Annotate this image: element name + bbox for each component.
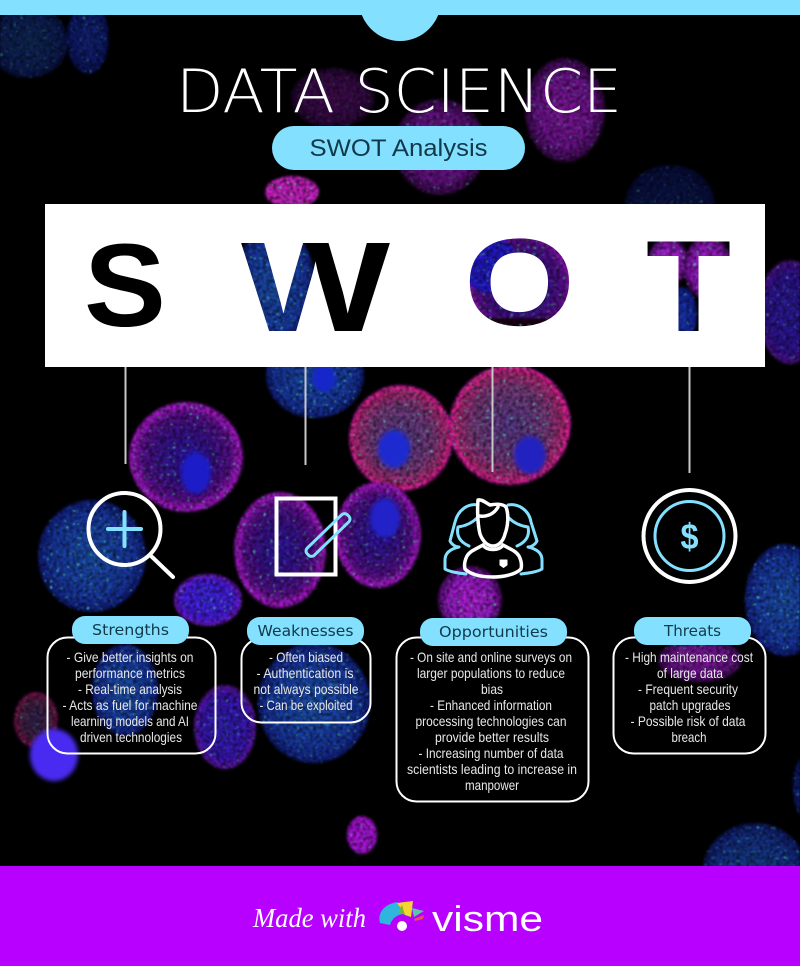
icon: dollar coin	[644, 490, 736, 582]
panel: opportunities	[396, 618, 588, 802]
text: opportunities list	[407, 649, 577, 793]
text: opportunities list: manpower	[465, 777, 519, 793]
label: weaknesses: Weaknesses	[258, 622, 354, 640]
label: threats	[634, 617, 751, 645]
text: weaknesses list	[254, 649, 359, 713]
text: opportunities list: larger populations to reduce	[417, 665, 565, 681]
text: threats list	[625, 649, 753, 745]
decorative bright nuclei	[30, 364, 546, 781]
text: weaknesses list: - Often biased	[269, 649, 343, 665]
text: threats list: of large data	[657, 665, 723, 681]
text: opportunities list: - Increasing number of data	[418, 745, 564, 761]
text: weaknesses list: - Can be exploited	[260, 697, 352, 713]
text: opportunities list: scientists leading to increase in	[407, 761, 577, 777]
text: threats list: - Frequent security	[638, 681, 738, 697]
connector lines	[126, 367, 690, 473]
text: weaknesses list: not always possible	[254, 681, 359, 697]
label: strengths	[72, 616, 189, 644]
text: opportunities list: processing technologies can	[416, 713, 566, 729]
text: weaknesses list: - Authentication is	[256, 665, 354, 681]
panel: threats	[614, 617, 766, 754]
icon: visme logo	[379, 901, 424, 931]
top bar with semicircle	[0, 0, 800, 41]
text: threats list: breach	[672, 729, 706, 745]
panel: strengths	[48, 616, 216, 754]
text: strengths list: - Real-time analysis	[78, 681, 182, 697]
text: strengths list: performance metrics	[75, 665, 185, 681]
icon: group of people	[445, 500, 542, 577]
text: strengths list	[62, 649, 198, 745]
SWOT letter panel	[45, 204, 765, 367]
text: opportunities list: bias	[481, 681, 503, 697]
label: opportunities	[420, 618, 567, 646]
panel: weaknesses	[242, 617, 370, 722]
footer text: made with: Made with	[252, 903, 366, 933]
text: strengths list: - Acts as fuel for machine	[62, 697, 198, 713]
text: threats list: - Possible risk of data	[630, 713, 746, 729]
text: strengths list: - Give better insights on	[66, 649, 194, 665]
icon: document and pencil	[276, 498, 352, 574]
text: strengths list: learning models and AI	[71, 713, 189, 729]
icon: dollar coin: $	[680, 516, 698, 557]
text: strengths list: driven technologies	[80, 729, 182, 745]
subtitle pill: SWOT Analysis	[310, 135, 488, 162]
label: opportunities: Opportunities	[439, 623, 548, 641]
icon: magnifier	[88, 493, 173, 577]
footer band	[0, 866, 800, 966]
footer text: visme wordmark: visme	[432, 898, 543, 939]
label: strengths: Strengths	[92, 621, 169, 639]
title: DATA SCIENCE	[176, 57, 622, 127]
text: opportunities list: provide better results	[435, 729, 549, 745]
label: threats: Threats	[663, 622, 721, 640]
text: opportunities list: - Enhanced information	[430, 697, 552, 713]
text: threats list: patch upgrades	[650, 697, 730, 713]
text: opportunities list: - On site and online surveys on	[410, 649, 572, 665]
subtitle pill	[272, 126, 525, 170]
text: threats list: - High maintenance cost	[625, 649, 753, 665]
